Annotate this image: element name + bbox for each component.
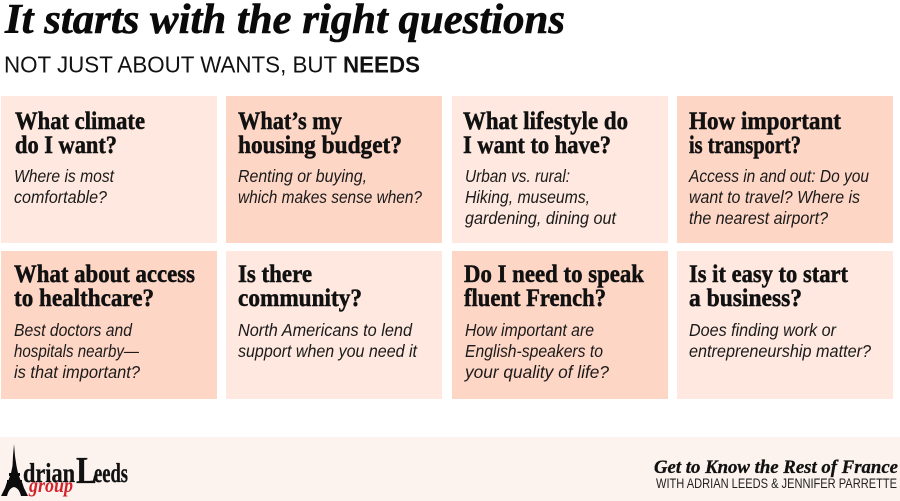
- wordmark: L: L: [76, 450, 97, 492]
- heading: a business?: [689, 285, 802, 312]
- logo: group: group: [28, 475, 73, 497]
- heading: I want to have?: [463, 132, 611, 159]
- heading: community?: [238, 285, 362, 312]
- text block: your quality of life?: [464, 362, 609, 382]
- footer band: [0, 437, 900, 501]
- wordmark: drian: drian: [23, 458, 75, 488]
- text block: Hiking, museums,: [465, 187, 590, 207]
- panel background: [452, 96, 668, 243]
- panel background: [677, 96, 893, 243]
- text block: hospitals nearby—: [14, 341, 139, 361]
- panel background: [226, 96, 442, 243]
- panel: community: [226, 251, 442, 399]
- text block: Does finding work or: [689, 320, 837, 340]
- heading: Is it easy to start: [689, 261, 849, 288]
- heading: do I want?: [15, 132, 117, 159]
- subtitle: NOT JUST ABOUT WANTS, BUT NEEDS: [4, 52, 420, 78]
- text block: is that important?: [14, 362, 140, 382]
- footer series title: Get to Know the Rest of France: [654, 458, 898, 478]
- icon: Eiffel Tower: [1, 444, 28, 496]
- heading: housing budget?: [238, 132, 402, 159]
- heading: What’s my: [238, 108, 342, 135]
- heading: What about access: [14, 261, 195, 288]
- heading: fluent French?: [464, 285, 606, 312]
- panel: French: [452, 251, 668, 399]
- logo: [1, 444, 128, 497]
- heading: Is there: [238, 261, 312, 288]
- text block: gardening, dining out: [465, 208, 617, 228]
- text block: the nearest airport?: [689, 208, 828, 228]
- text block: North Americans to lend: [238, 320, 413, 340]
- text block: which makes sense when?: [238, 187, 422, 207]
- text block: support when you need it: [238, 341, 418, 361]
- text block: want to travel? Where is: [689, 187, 860, 207]
- panel background: [226, 251, 442, 399]
- panel background: [677, 251, 893, 399]
- panel: business: [677, 251, 893, 399]
- logo wordmark: [23, 450, 128, 492]
- panel background: [1, 251, 217, 399]
- panel: healthcare: [1, 251, 217, 399]
- panel background: [452, 251, 668, 399]
- text block: Renting or buying,: [238, 166, 367, 186]
- text block: comfortable?: [14, 187, 107, 207]
- panel background: [1, 96, 217, 243]
- panel: climate: [1, 96, 217, 243]
- text block: entrepreneurship matter?: [689, 341, 871, 361]
- panel: lifestyle: [452, 96, 668, 243]
- panel: housing budget: [226, 96, 442, 243]
- heading: What climate: [15, 108, 145, 135]
- text block: Access in and out: Do you: [688, 166, 869, 186]
- text block: English-speakers to: [465, 341, 603, 361]
- panel: transport: [677, 96, 893, 243]
- text block: Urban vs. rural:: [465, 166, 570, 186]
- heading: to healthcare?: [14, 285, 154, 312]
- wordmark: eeds: eeds: [94, 458, 128, 488]
- heading: is transport?: [689, 132, 801, 159]
- heading: How important: [689, 108, 842, 135]
- heading: What lifestyle do: [463, 108, 628, 135]
- text block: How important are: [465, 320, 594, 340]
- heading: Do I need to speak: [464, 261, 644, 288]
- text block: Best doctors and: [14, 320, 133, 340]
- text block: Where is most: [14, 166, 115, 186]
